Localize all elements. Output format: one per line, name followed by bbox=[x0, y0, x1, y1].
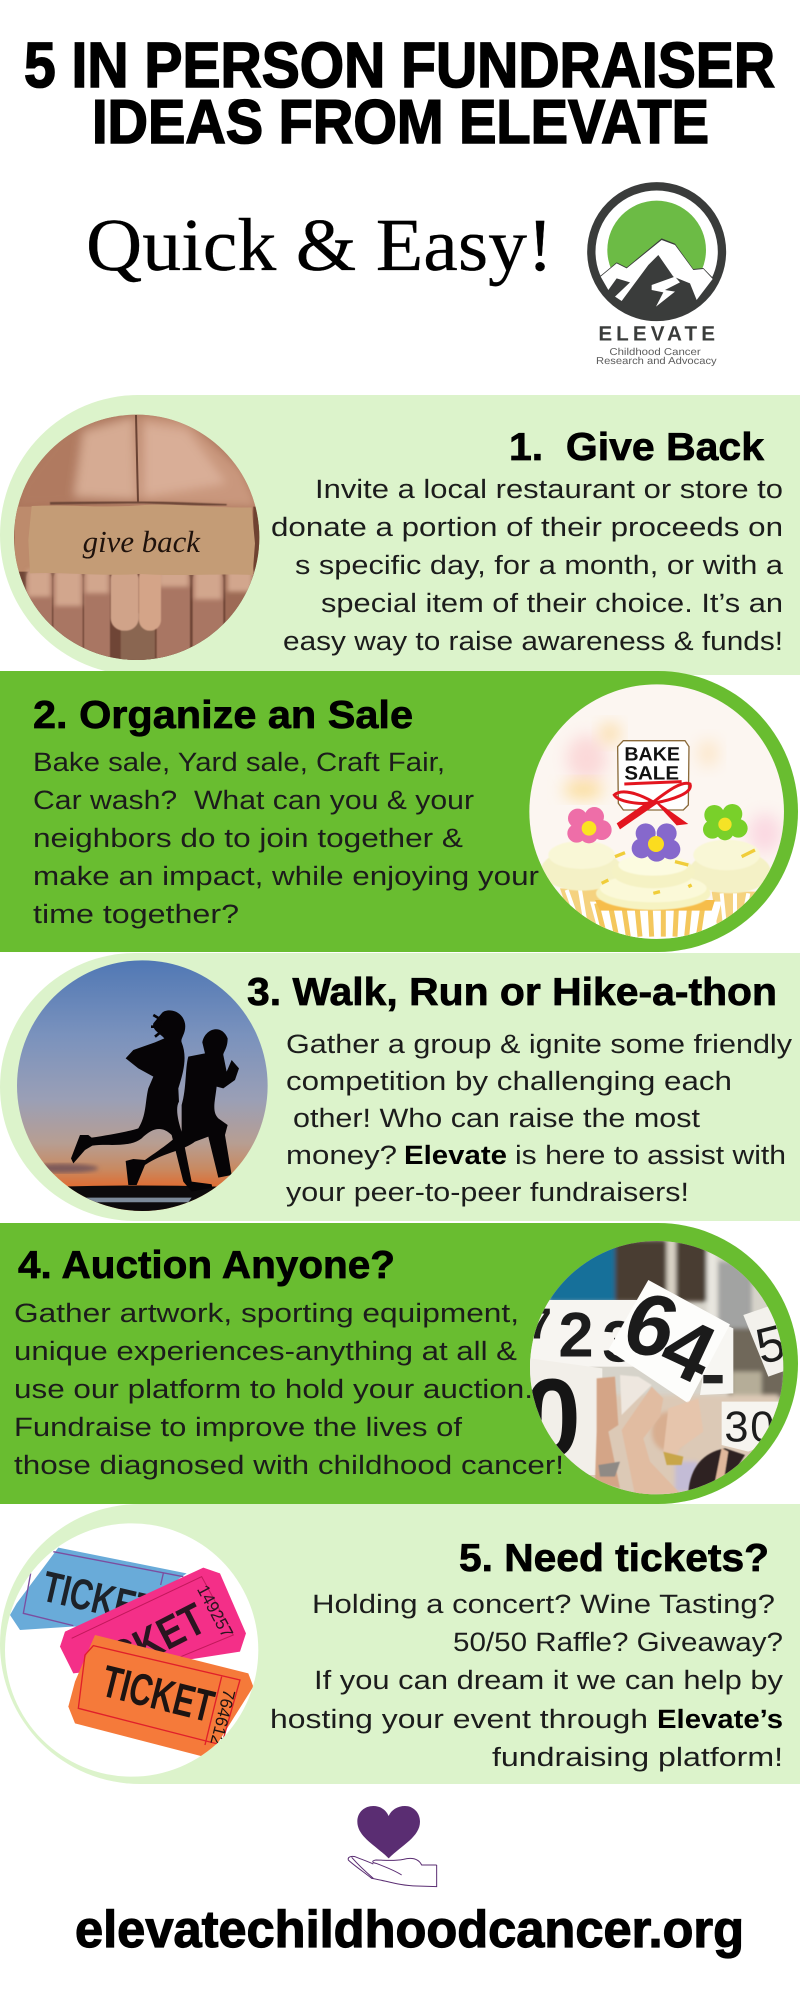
photo: auction paddles: 2 bbox=[558, 1300, 594, 1370]
paddle behind 64 bbox=[700, 1326, 734, 1395]
panel 5 body text: hosting your event through bbox=[270, 1704, 648, 1734]
photo: auction paddles: 7 bbox=[528, 1299, 552, 1348]
cupcake frosting bbox=[541, 840, 771, 893]
panel 4 body text: unique experiences-anything at all & bbox=[14, 1336, 517, 1366]
panel 4 body text: those diagnosed with childhood cancer! bbox=[14, 1450, 564, 1480]
logo: Elevate: Childhood Cancer bbox=[609, 346, 701, 357]
photo: auction paddles: 5 bbox=[750, 1314, 791, 1375]
logo: Elevate bbox=[591, 186, 722, 366]
panel 3: Walk Run Hike background bbox=[0, 953, 800, 1221]
panel 3 body text: is here to assist with bbox=[515, 1140, 786, 1170]
pink ticket: CKET bbox=[101, 1593, 213, 1683]
red ribbon bbox=[614, 782, 690, 803]
photo: runners silhouette at sunset bbox=[15, 958, 272, 1215]
panel 2: Organize a Sale background bbox=[0, 671, 798, 952]
panel 1 heading: 1. Give Back bbox=[509, 426, 764, 469]
panel 1 body text: s specific day, for a month, or with a bbox=[295, 550, 783, 580]
photo: bake sale cupcakes: BAKE bbox=[624, 743, 680, 765]
panel 5 body text: fundraising platform! bbox=[492, 1742, 783, 1772]
panel 5 body text bbox=[270, 1589, 784, 1772]
panel 1 body text: special item of their choice. It’s an bbox=[321, 588, 783, 618]
panel 4 heading: 4. Auction Anyone? bbox=[18, 1244, 395, 1287]
title: IDEAS FROM ELEVATE bbox=[92, 88, 709, 157]
photo: auction paddles: 30 bbox=[724, 1402, 774, 1451]
panel 3 body text: Elevate bbox=[404, 1140, 507, 1170]
title bbox=[24, 29, 775, 157]
cupcake side liners bbox=[560, 888, 756, 930]
photo: give back hands bbox=[10, 410, 267, 670]
panel 4 body text: Fundraise to improve the lives of bbox=[14, 1412, 463, 1442]
photo: auction paddles: 3 bbox=[602, 1309, 635, 1374]
paddle 64 bbox=[608, 1280, 730, 1403]
panel 1 body text: easy way to raise awareness & funds! bbox=[283, 626, 783, 656]
panel 1: Give Back background bbox=[0, 395, 800, 675]
logo: Elevate: Research and Advocacy bbox=[596, 355, 717, 366]
panel 3 heading: 3. Walk, Run or Hike-a-thon bbox=[247, 971, 777, 1014]
panel 3 body text: your peer-to-peer fundraisers! bbox=[286, 1177, 689, 1207]
panel 3 body text bbox=[286, 1029, 793, 1207]
panel 3 body text: Gather a group & ignite some friendly bbox=[286, 1029, 793, 1059]
photo: auction paddles bbox=[530, 1241, 784, 1494]
panel 2 body text bbox=[33, 747, 539, 929]
paddle 5 bbox=[743, 1306, 784, 1377]
photo: bake sale cupcakes: SALE bbox=[624, 762, 679, 784]
orange ticket: TICKET bbox=[97, 1656, 219, 1732]
panel 2 body text: neighbors do to join together & bbox=[33, 823, 463, 853]
panel 2 body text: Bake sale, Yard sale, Craft Fair, bbox=[33, 747, 445, 777]
blue ticket: TICKET bbox=[38, 1562, 159, 1635]
blue ticket bbox=[10, 1548, 187, 1635]
panel 2 body text: make an impact, while enjoying your bbox=[33, 861, 539, 891]
panel 4: Auction background bbox=[0, 1223, 798, 1504]
panel 5 body text: Holding a concert? Wine Tasting? bbox=[312, 1589, 775, 1619]
panel 4 body text: Gather artwork, sporting equipment, bbox=[14, 1298, 519, 1328]
panel 3 body text: other! Who can raise the most bbox=[293, 1103, 701, 1133]
panel 1 body text bbox=[271, 474, 783, 656]
photo: bake sale cupcakes bbox=[525, 680, 792, 947]
panel 1 body text: donate a portion of their proceeds on bbox=[271, 512, 783, 542]
pink ticket: 149257 bbox=[193, 1582, 237, 1641]
paddle 2 and 3 bbox=[528, 1300, 638, 1367]
photo: auction paddles: 4 bbox=[648, 1298, 729, 1402]
paddle 0 bbox=[530, 1358, 602, 1475]
photo: raffle tickets bbox=[5, 1523, 258, 1777]
panel 2 heading: 2. Organize an Sale bbox=[33, 694, 413, 737]
panel 3 body text: money? bbox=[286, 1140, 397, 1170]
website url: elevatechildhoodcancer.org bbox=[75, 1901, 744, 1959]
panel 5 body text: Elevate’s bbox=[657, 1704, 783, 1734]
pink ticket bbox=[60, 1568, 246, 1683]
panel 3 body text: competition by challenging each bbox=[286, 1066, 732, 1096]
subtitle: Quick & Easy: Quick & Easy! bbox=[86, 204, 553, 287]
panel 2 body text: time together? bbox=[33, 899, 239, 929]
panel 1 body text: Invite a local restaurant or store to bbox=[315, 474, 783, 504]
panel 5 body text: 50/50 Raffle? Giveaway? bbox=[453, 1627, 783, 1657]
panel 5: Need tickets background bbox=[0, 1504, 800, 1784]
panel 4 body text bbox=[14, 1298, 564, 1480]
hands bbox=[595, 1375, 745, 1495]
logo: Elevate: ELEVATE bbox=[598, 322, 715, 345]
panel 5 heading: 5. Need tickets? bbox=[459, 1537, 769, 1580]
panel 5 body text: If you can dream it we can help by bbox=[314, 1665, 784, 1695]
photo: auction paddles: 6 bbox=[619, 1274, 680, 1377]
bake sale sign bbox=[618, 741, 689, 810]
orange ticket bbox=[68, 1635, 253, 1757]
photo: give back hands: give back bbox=[83, 525, 201, 559]
paddle 30 bbox=[722, 1402, 782, 1452]
icon: heart in hand bbox=[348, 1806, 437, 1887]
panel 4 body text: use our platform to hold your auction. bbox=[14, 1374, 533, 1404]
flowers bbox=[567, 807, 612, 843]
panel 2 body text: Car wash? What can you & your bbox=[33, 785, 474, 815]
orange ticket: 764612 bbox=[206, 1687, 239, 1747]
photo: auction paddles: 0 bbox=[523, 1356, 581, 1480]
